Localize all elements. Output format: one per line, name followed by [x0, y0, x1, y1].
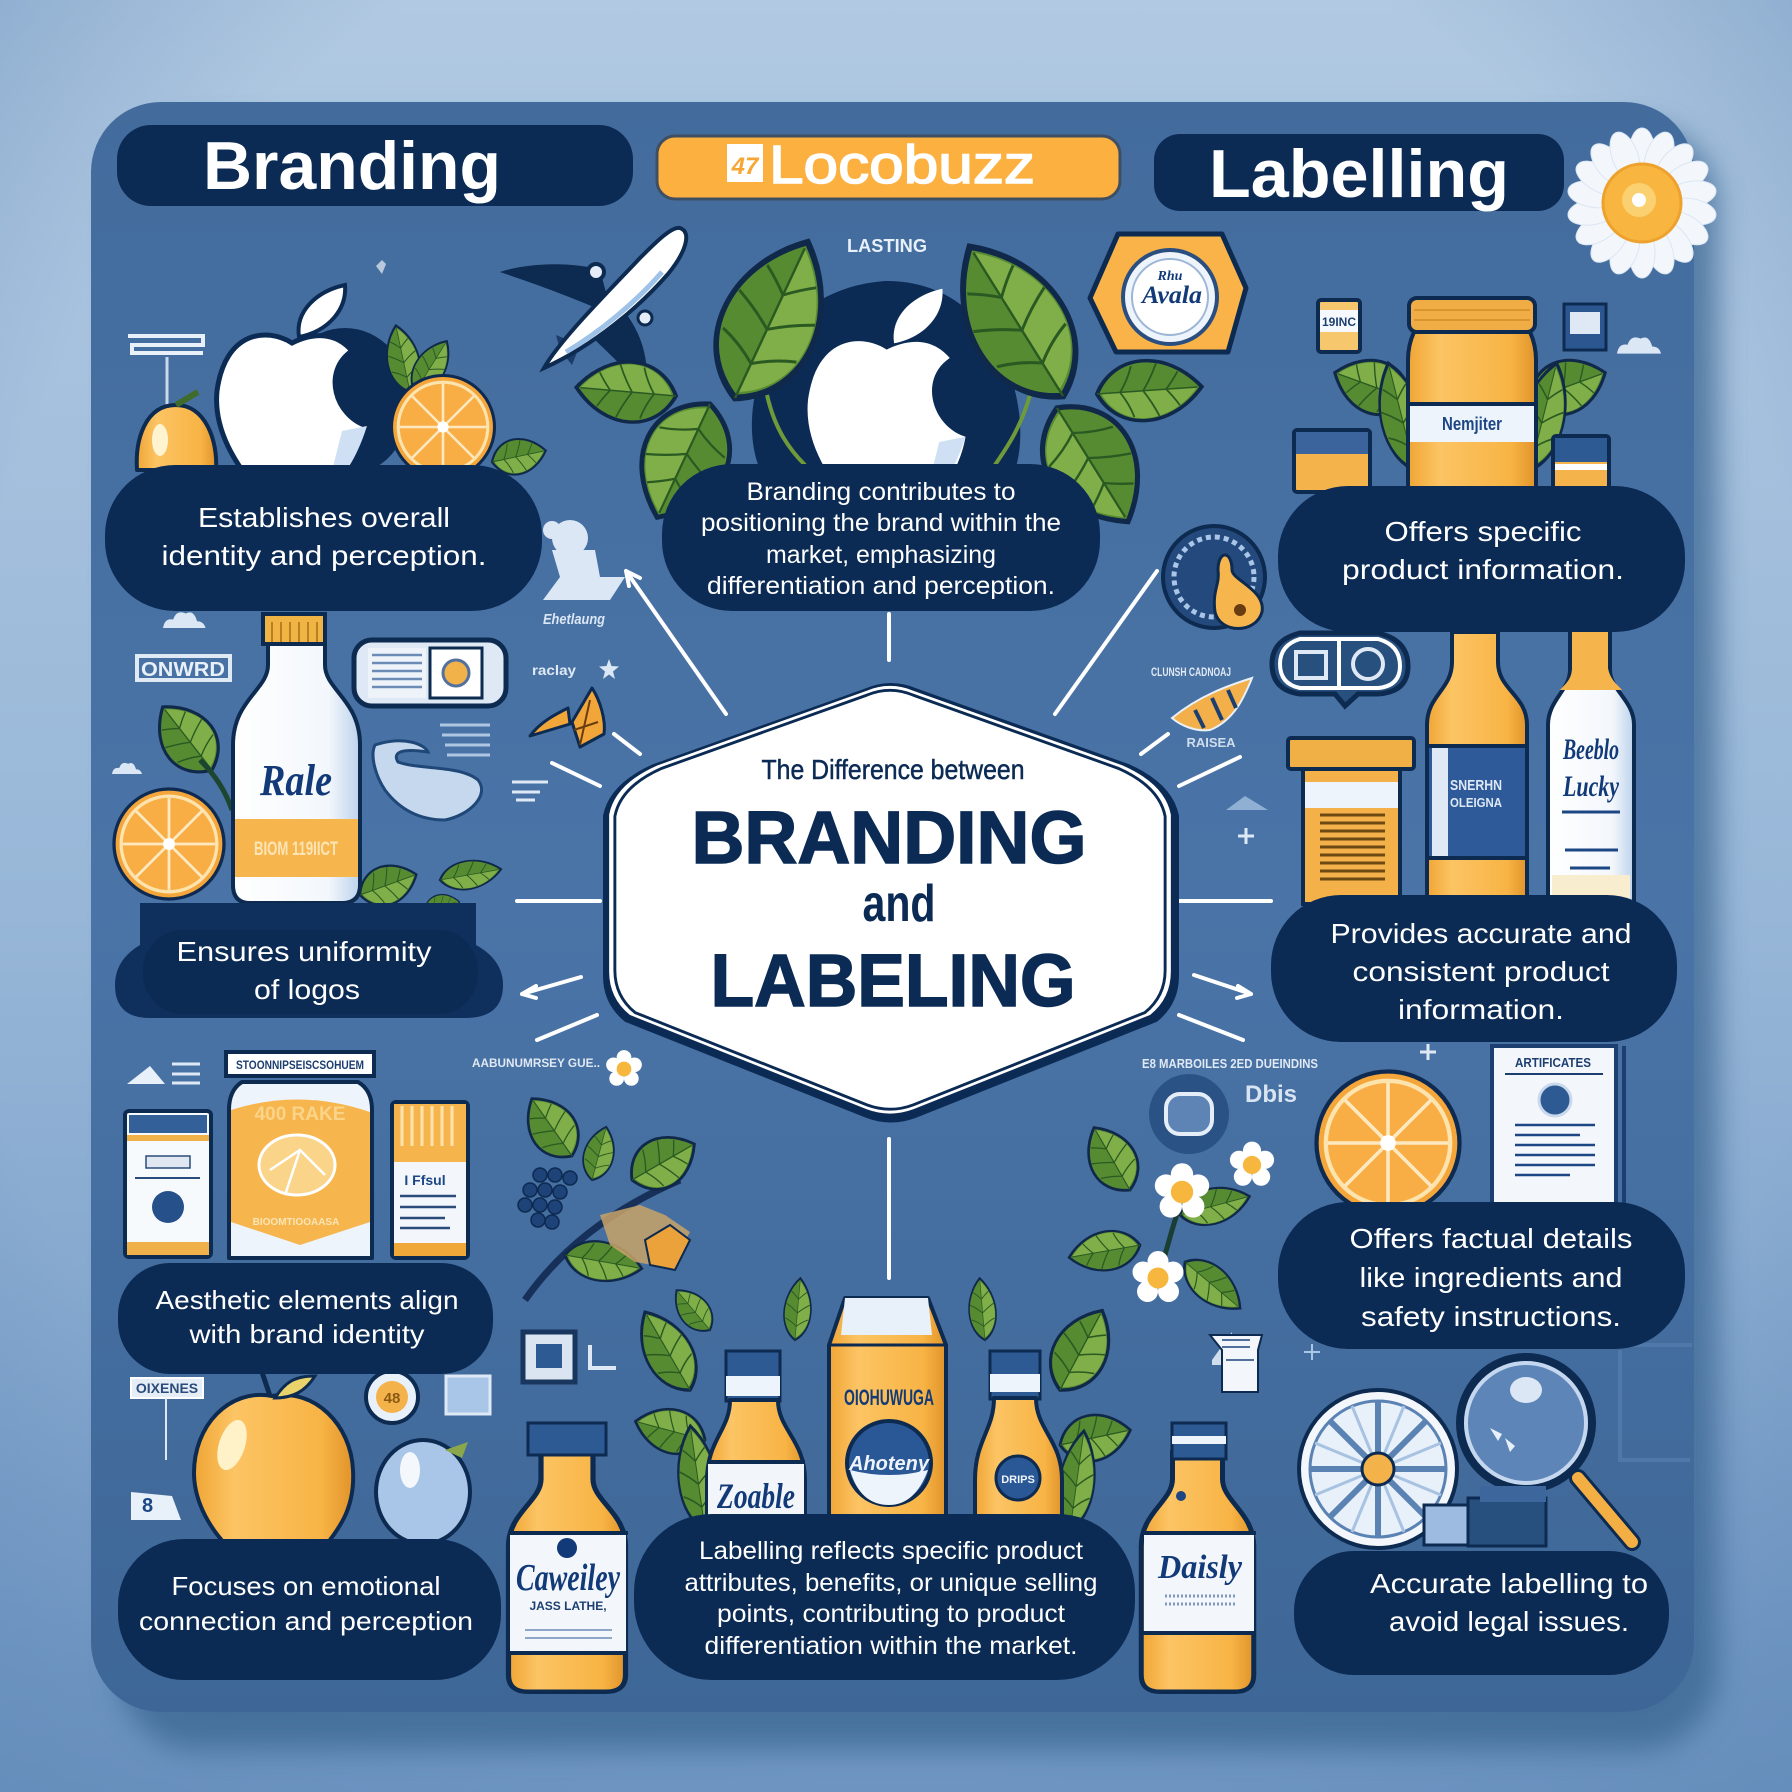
illustration: central apple with leaves: [574, 222, 1204, 545]
bird: [1172, 678, 1252, 730]
leaves right of bottle: [353, 856, 423, 913]
callout: uniformity of logos: [115, 903, 503, 1018]
small leaves: [380, 322, 426, 395]
round badge: [1163, 526, 1265, 628]
illustration: center-left branch and labels: [472, 520, 707, 1382]
jar lid: [1409, 298, 1535, 332]
left small bottle: Zoable: [716, 1476, 795, 1516]
magnifier lens: [1460, 1357, 1592, 1489]
center carton: [829, 1298, 946, 1520]
callout: consistent information: information.: [1398, 994, 1564, 1025]
illustration: top-left apple logo group: [128, 260, 549, 491]
leaves: [692, 222, 851, 418]
tiny label: E8 MARBOILES 2ED DUEINDINS: [1142, 1056, 1318, 1071]
small panel: [446, 1376, 490, 1414]
tiny label: Ehetlaung: [543, 611, 605, 628]
leaves: [513, 1086, 591, 1169]
small insect: [376, 260, 386, 274]
callout: factual details: like ingredients and: [1360, 1262, 1622, 1293]
heading: Branding: [117, 125, 633, 206]
document: [1492, 1046, 1624, 1206]
orange band: BIOM 119IICT: [254, 839, 338, 860]
amber bottle: [1427, 632, 1527, 905]
cracked nut: [600, 1205, 690, 1268]
illustration: center-right icons: [1066, 526, 1436, 1392]
fuselage: [544, 228, 686, 368]
plus: [1420, 1044, 1436, 1060]
big jar: [229, 1082, 372, 1258]
illustration: orange badge: [1090, 234, 1246, 352]
small doc: [1210, 1332, 1262, 1392]
callout: consistent information: consistent product: [1352, 956, 1610, 987]
callout: aesthetic elements: Aesthetic elements align: [156, 1285, 458, 1315]
shell: [373, 741, 482, 820]
right wing: [590, 312, 647, 394]
small square icon: [523, 1332, 575, 1382]
logo: Locobuzz: [657, 135, 1120, 199]
tiny label: Dbis: [1245, 1081, 1297, 1108]
callout: product attributes: points, contributing to product: [717, 1600, 1065, 1628]
callout: factual details: Offers factual details: [1350, 1223, 1632, 1254]
cloud: [1617, 337, 1661, 354]
small tag left: [1318, 300, 1360, 352]
speech icon: [1272, 633, 1408, 706]
callout: aesthetic elements: with brand identity: [188, 1319, 424, 1349]
callout: market positioning: Branding contributes to: [746, 478, 1016, 506]
right box: [392, 1102, 468, 1258]
coin: [366, 1371, 418, 1423]
tag: [131, 1492, 181, 1520]
apple logo: [808, 289, 966, 505]
flower: [1132, 1251, 1184, 1302]
callout: product attributes: Labelling reflects specific product: [699, 1537, 1083, 1565]
small heading: LASTING: [847, 236, 927, 256]
right box: I Ffsul: [404, 1172, 446, 1188]
orange: [114, 789, 224, 899]
leaves right: [1037, 1298, 1126, 1402]
illustration: bottom-left fruit group: [131, 1371, 490, 1545]
stem: [200, 760, 232, 810]
big jar tag: [226, 1052, 374, 1076]
orange slice: [1316, 1072, 1460, 1214]
small daisy: [606, 1050, 642, 1086]
coin: 48: [384, 1390, 400, 1407]
dark apple shape: [279, 328, 411, 476]
callout: emotional connection: Focuses on emotional: [172, 1571, 440, 1601]
lines icon: [440, 725, 490, 755]
star: [599, 659, 619, 679]
callout: product information: product information.: [1342, 554, 1624, 585]
callout: uniformity of logos: Ensures uniformity: [176, 936, 432, 967]
illustration: bottom-center products: [508, 1277, 1256, 1692]
central hexagon badge: [605, 685, 1177, 1120]
side leaves: [1326, 348, 1419, 425]
small pin icon: [590, 1345, 616, 1368]
plus: [1238, 828, 1254, 844]
small tag left: 19INC: [1322, 315, 1356, 329]
callout: market positioning: market, emphasizing: [766, 541, 996, 569]
cloud: [163, 612, 206, 628]
callout: market positioning: differentiation and perception.: [707, 572, 1055, 600]
callout: legal issues: Accurate labelling to: [1370, 1568, 1648, 1599]
side leaf: [488, 433, 549, 479]
heading: Branding: Branding: [203, 128, 501, 204]
amber bottle: OLEIGNA: [1450, 795, 1503, 810]
large bottle right: Daisly: [1157, 1549, 1243, 1586]
center carton: OIOHUWUGA: [844, 1385, 934, 1410]
berries: [518, 1168, 577, 1229]
callout: overall identity: identity and perception.: [162, 540, 486, 571]
white bottle: Lucky: [1562, 770, 1620, 803]
callout: overall identity: Establishes overall: [198, 502, 450, 533]
callout: factual details: [1278, 1202, 1685, 1349]
callout: consistent information: Provides accurate and: [1330, 918, 1632, 949]
tiny label: RAISEA: [1186, 735, 1236, 750]
flowers: [1155, 1163, 1209, 1218]
branch: [1150, 1180, 1195, 1290]
script label: Rale: [259, 756, 332, 805]
logo mark: [727, 144, 763, 182]
jar: [1303, 769, 1400, 904]
yellow fruit: [137, 392, 216, 470]
illustration: daisy: [1566, 128, 1718, 278]
callout: aesthetic elements: [118, 1263, 493, 1374]
callout: product information: [1278, 486, 1685, 632]
callout: emotional connection: [118, 1539, 501, 1680]
illustration: airplane: [500, 228, 686, 394]
sign icon: [128, 336, 203, 353]
callout: uniformity of logos: of logos: [254, 974, 360, 1005]
magnifier handle: [1578, 1478, 1632, 1542]
big jar: BIOOMTIOOAASA: [253, 1217, 339, 1228]
callout: product attributes: differentiation within the market.: [704, 1632, 1078, 1660]
small cloud: [112, 763, 142, 774]
cloud and pedestal: [543, 520, 625, 600]
big jar tag: STOONNIPSEISCSOHUEM: [236, 1058, 364, 1072]
lines: [172, 1064, 200, 1083]
jar lid: [1288, 738, 1414, 769]
large bottle left: Caweiley: [516, 1557, 620, 1599]
mountain: [1226, 796, 1268, 810]
callout: overall identity: [105, 465, 542, 611]
callout: legal issues: avoid legal issues.: [1389, 1606, 1629, 1637]
leaf: [142, 691, 233, 786]
badge word and: and: [862, 875, 936, 933]
heading: Labelling: Labelling: [1209, 136, 1509, 212]
plus: [1304, 1344, 1320, 1360]
orange slice: [392, 376, 494, 478]
badge heading branding: BRANDING: [692, 796, 1086, 879]
left small bottle: [707, 1351, 805, 1522]
jar body: [1408, 332, 1536, 490]
lines icon: [512, 782, 548, 800]
logo word: Locobuzz: [769, 135, 1035, 195]
callout: legal issues: [1294, 1551, 1669, 1675]
white bottle: [1548, 632, 1634, 905]
callout: market positioning: positioning the brand within the: [701, 509, 1061, 537]
badge heading labeling: LABELING: [710, 939, 1076, 1022]
left small jar: [1294, 430, 1370, 492]
callout: product information: Offers specific: [1384, 516, 1582, 547]
tail fin: [556, 335, 580, 365]
right small jar: [1553, 436, 1609, 490]
tiny label: raclay: [532, 662, 576, 678]
tiny label: CLUNSH CADNOAJ: [1151, 665, 1231, 679]
sign: [131, 1378, 203, 1460]
right small bottle: DRIPS: [1001, 1474, 1035, 1486]
illustration: left milk bottle group: [112, 612, 506, 918]
document: ARTIFICATES: [1515, 1055, 1591, 1070]
dial: [1299, 1390, 1457, 1548]
cap: [263, 614, 325, 644]
apple logo: [217, 285, 367, 491]
flower: [1230, 1142, 1274, 1186]
illustration: right bottles group: [1288, 632, 1634, 1214]
dark apple backdrop: [752, 281, 1020, 470]
callout: product attributes: attributes, benefits, or unique selling: [684, 1569, 1098, 1597]
small tag right: [1564, 304, 1606, 350]
amber bottle: SNERHN: [1450, 777, 1502, 794]
callout: product attributes: [634, 1514, 1135, 1680]
round icon: [1149, 1074, 1229, 1154]
right small bottle: [975, 1351, 1062, 1520]
logo mark: 47: [731, 153, 760, 180]
callout: emotional connection: connection and perception: [139, 1606, 473, 1636]
white bottle: Beeblo: [1562, 733, 1619, 766]
tag: 8: [142, 1495, 153, 1517]
leaves: [1074, 1116, 1150, 1201]
illustration: orange badge: Avala: [1140, 282, 1202, 309]
callout: market positioning: [662, 464, 1100, 611]
info card: [354, 640, 506, 706]
callout: factual details: safety instructions.: [1361, 1301, 1621, 1332]
left wing: [500, 264, 612, 315]
center carton: Ahoteny: [848, 1453, 930, 1475]
orange chunk: [645, 1225, 690, 1270]
stems: [767, 395, 1030, 465]
big jar: 400 RAKE: [255, 1104, 345, 1125]
large bottle left: JASS LATHE,: [529, 1599, 607, 1613]
callout: consistent information: [1271, 895, 1677, 1042]
illustration: bottom-right inspection group: [1299, 1344, 1692, 1548]
circuit lines: [1600, 1345, 1692, 1460]
orange band: [235, 819, 358, 877]
large bottle left: [508, 1423, 628, 1692]
blue fruit: [376, 1440, 470, 1544]
yellow apple: [194, 1372, 353, 1545]
butterfly: [530, 688, 604, 747]
jar label: Nemjiter: [1442, 414, 1502, 434]
sign: OIXENES: [136, 1380, 198, 1396]
jar label: [1408, 404, 1536, 442]
mountain icon: [127, 1066, 165, 1084]
bottle: [233, 644, 360, 903]
onward sign: ONWRD: [141, 659, 225, 681]
connector lines and arrows: [517, 571, 1271, 1278]
leaves left: [625, 1301, 710, 1401]
branch stem: [525, 1180, 680, 1300]
left box: [125, 1111, 211, 1257]
illustration: top-right honey jar group: [1294, 298, 1661, 492]
small devices: [1424, 1486, 1546, 1546]
illustration: orange badge: Rhu: [1157, 269, 1183, 284]
illustration: middle-left jars group: [125, 1052, 468, 1258]
badge subtitle: The Difference between: [762, 754, 1024, 785]
large bottle right: [1141, 1423, 1256, 1692]
tiny label: AABUNUMRSEY GUE..: [472, 1056, 600, 1070]
